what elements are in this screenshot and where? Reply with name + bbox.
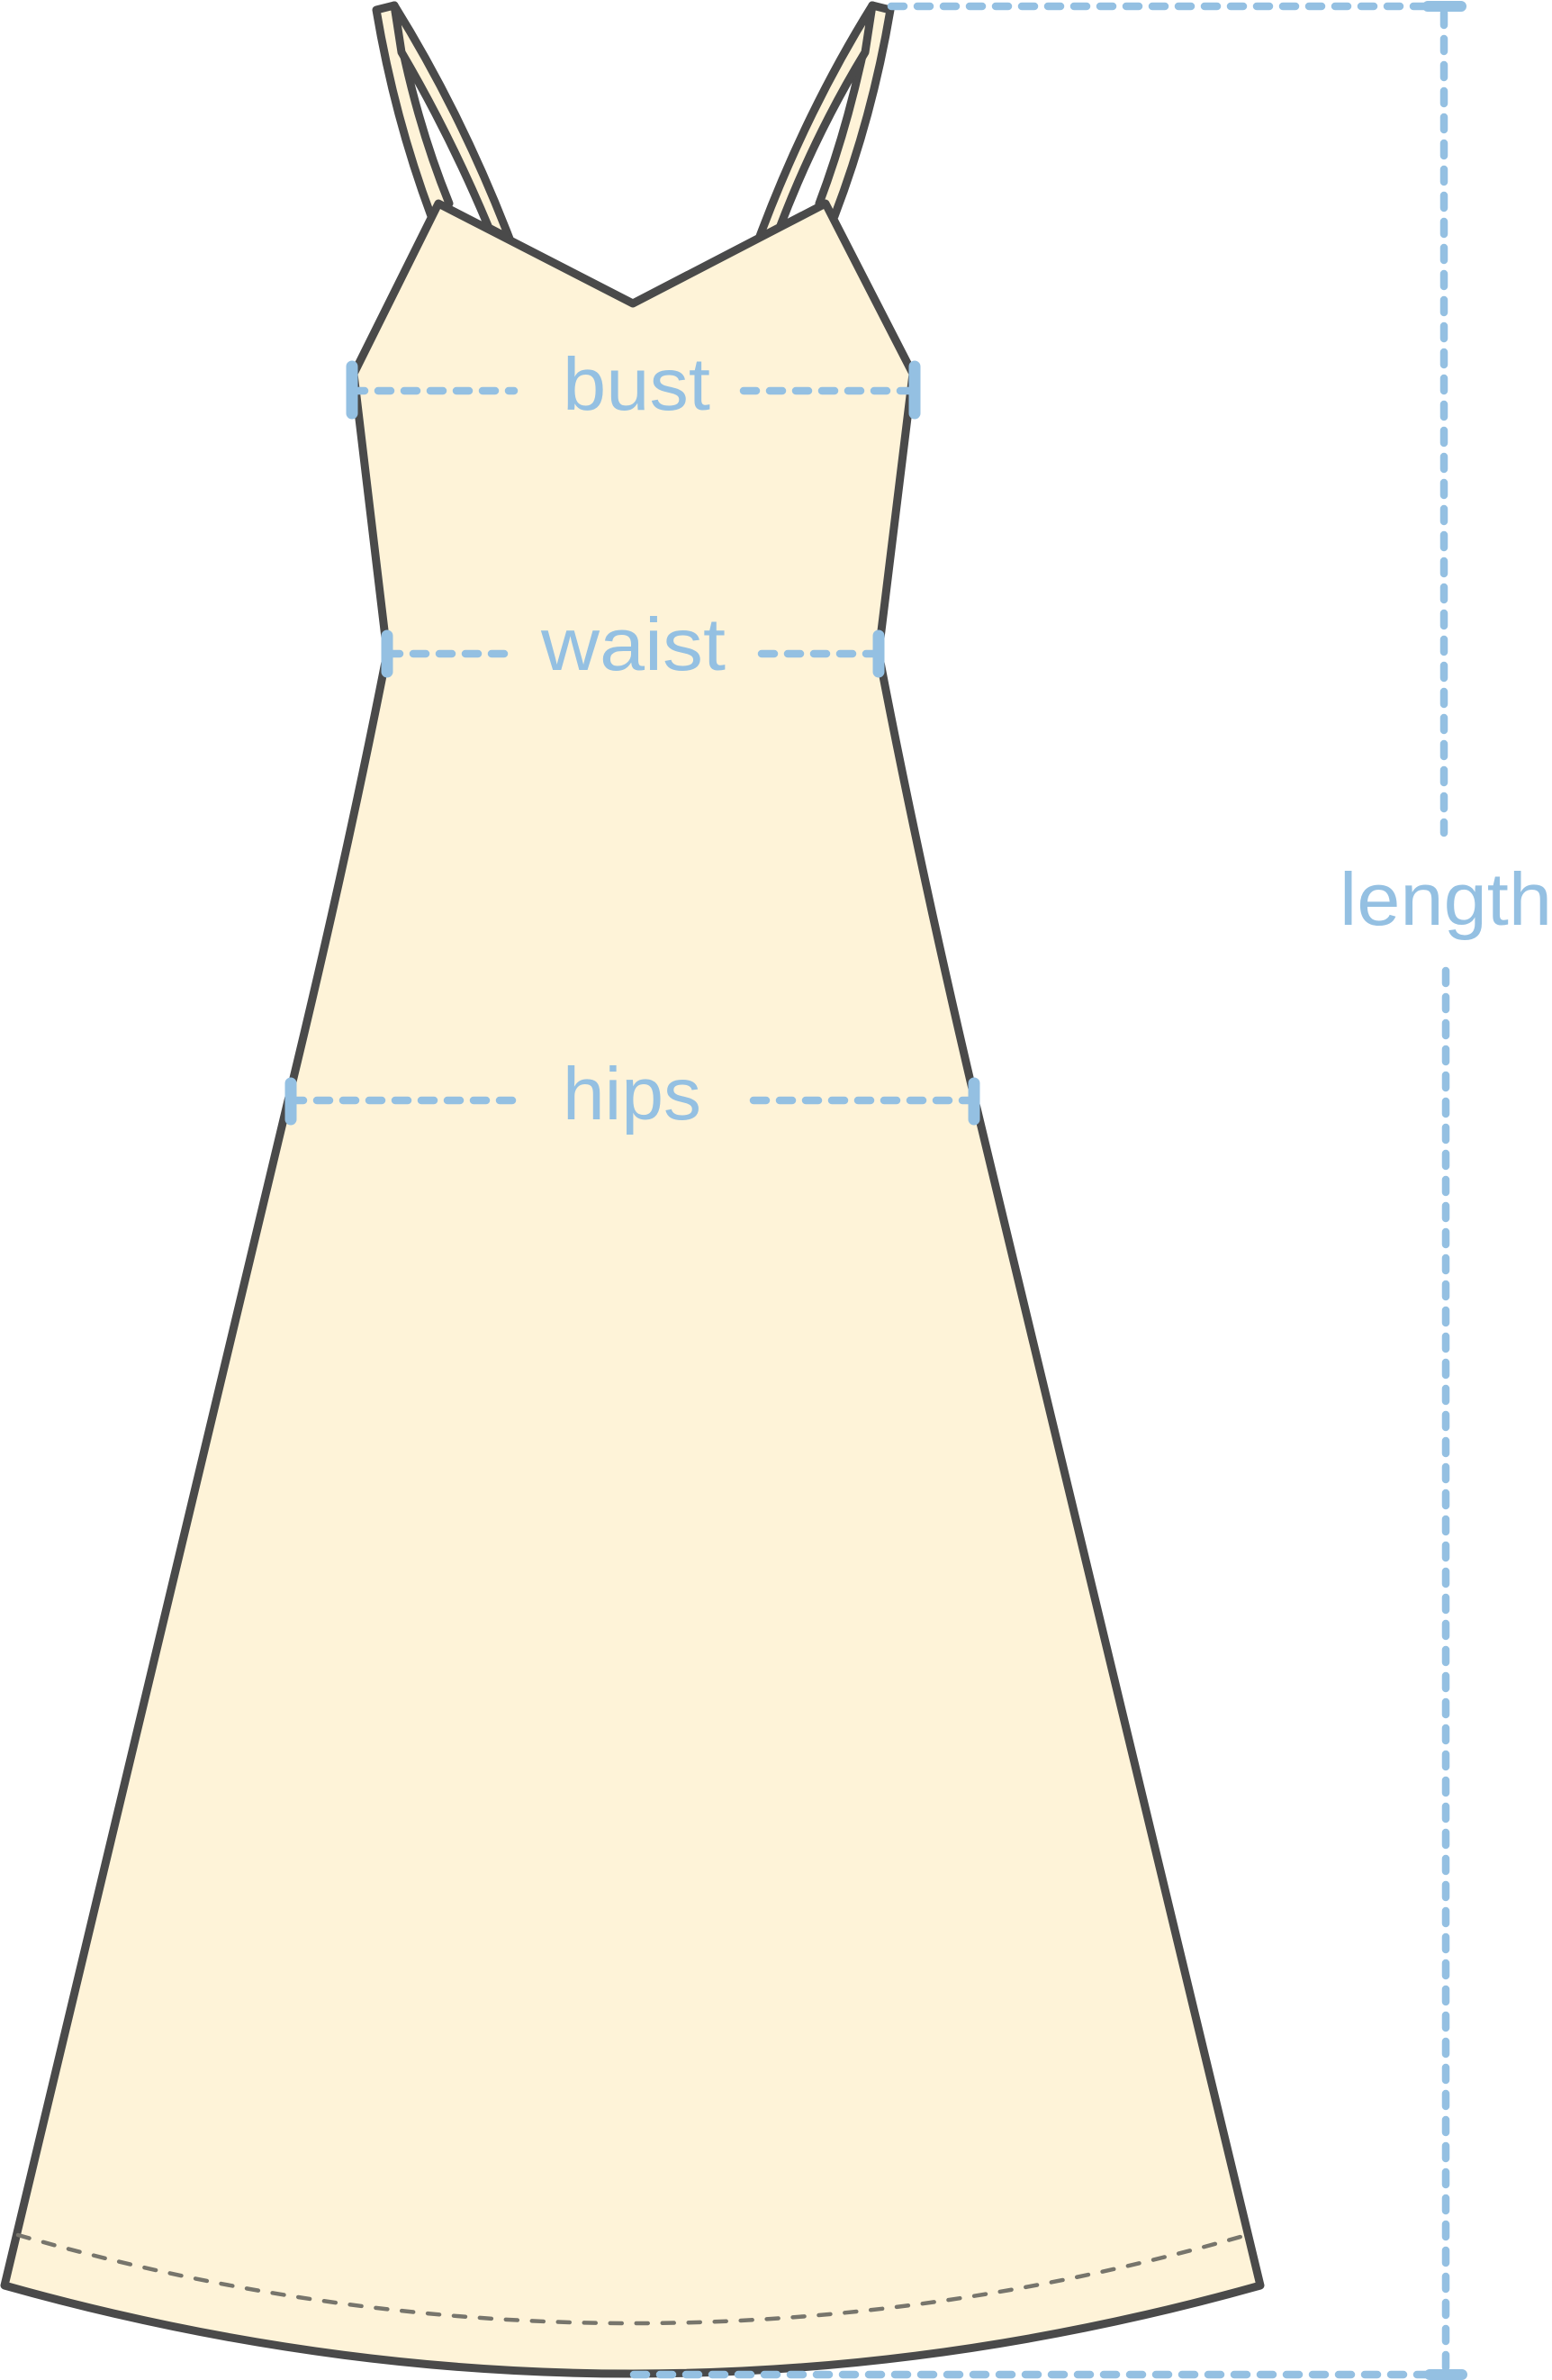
hem stitching line bbox=[18, 2235, 1247, 2323]
length measurement: length bbox=[1340, 857, 1552, 941]
hips measurement bbox=[291, 1052, 974, 1136]
bust measurement bbox=[352, 342, 915, 426]
length measurement bbox=[634, 6, 1552, 2375]
bust measurement: bust bbox=[563, 342, 710, 426]
left strap bbox=[376, 5, 510, 239]
dress body bbox=[5, 204, 1260, 2374]
waist measurement bbox=[387, 602, 879, 686]
hips measurement: hips bbox=[563, 1052, 701, 1136]
right strap bbox=[759, 5, 890, 239]
waist measurement: waist bbox=[540, 602, 726, 686]
